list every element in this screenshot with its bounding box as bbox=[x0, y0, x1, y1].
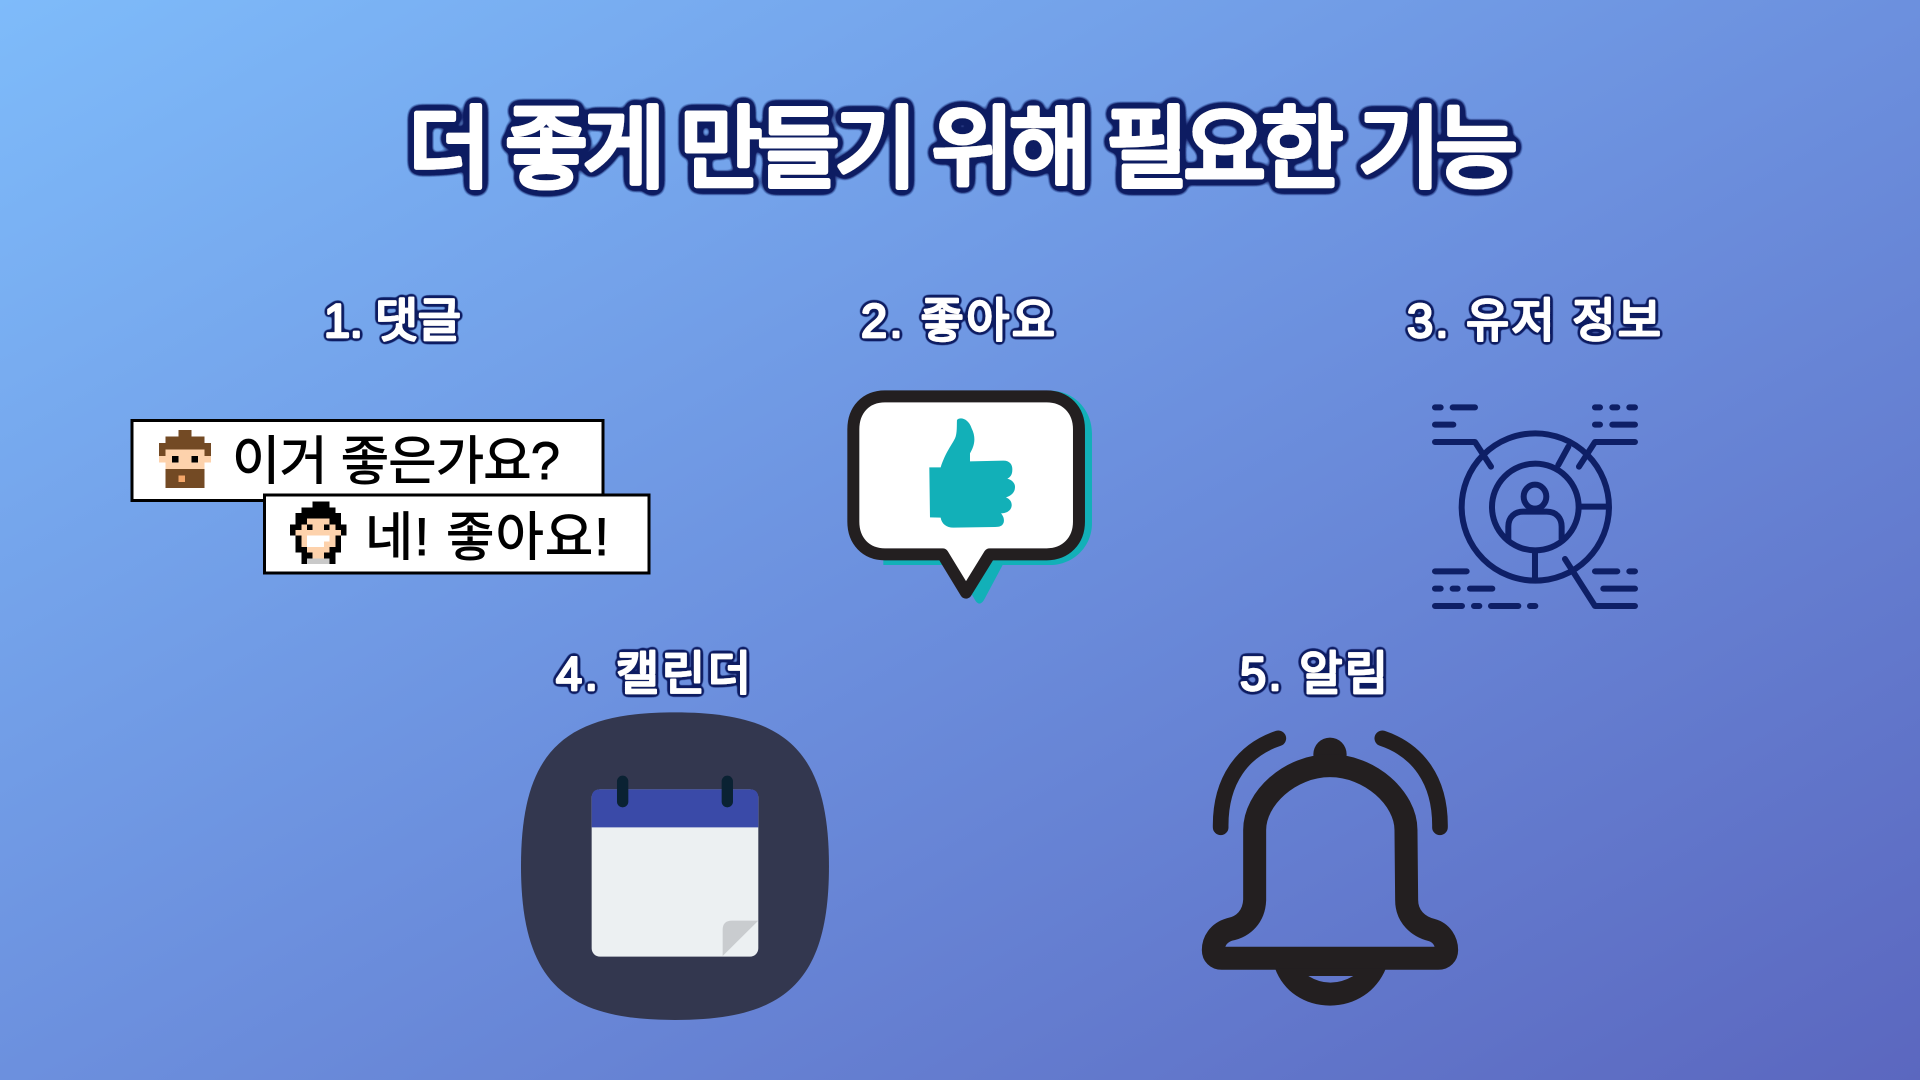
icon: smiling pixel avatar bbox=[290, 502, 347, 564]
heading: 3. 유저 정보: 3. 유저 정보 bbox=[1407, 294, 1661, 347]
chat bubble: answer bbox=[264, 495, 649, 573]
icon: user info radial diagram bbox=[1435, 407, 1635, 606]
icon: ringing bell bbox=[1213, 738, 1447, 1006]
heading: 2. 좋아요: 2. 좋아요 bbox=[861, 294, 1055, 347]
icon: thumbs up speech bubble bbox=[853, 391, 1092, 604]
question text: 이거 좋은가요? bbox=[232, 432, 560, 491]
answer text: 네! 좋아요! bbox=[365, 508, 609, 567]
icon: calendar bbox=[521, 712, 829, 1020]
panel: comments chat bbox=[132, 420, 649, 573]
heading: 4. 캘린더: 4. 캘린더 bbox=[556, 647, 751, 700]
title: 더 좋게 만들기 위해 필요한 기능 bbox=[408, 100, 1518, 200]
heading: 5. 알림: 5. 알림 bbox=[1240, 647, 1388, 700]
thumb glyph bbox=[929, 418, 1015, 528]
icon: bearded pixel avatar bbox=[159, 430, 211, 488]
heading: 1. 댓글: 1. 댓글 bbox=[324, 294, 461, 347]
chat bubble: question bbox=[132, 420, 603, 500]
